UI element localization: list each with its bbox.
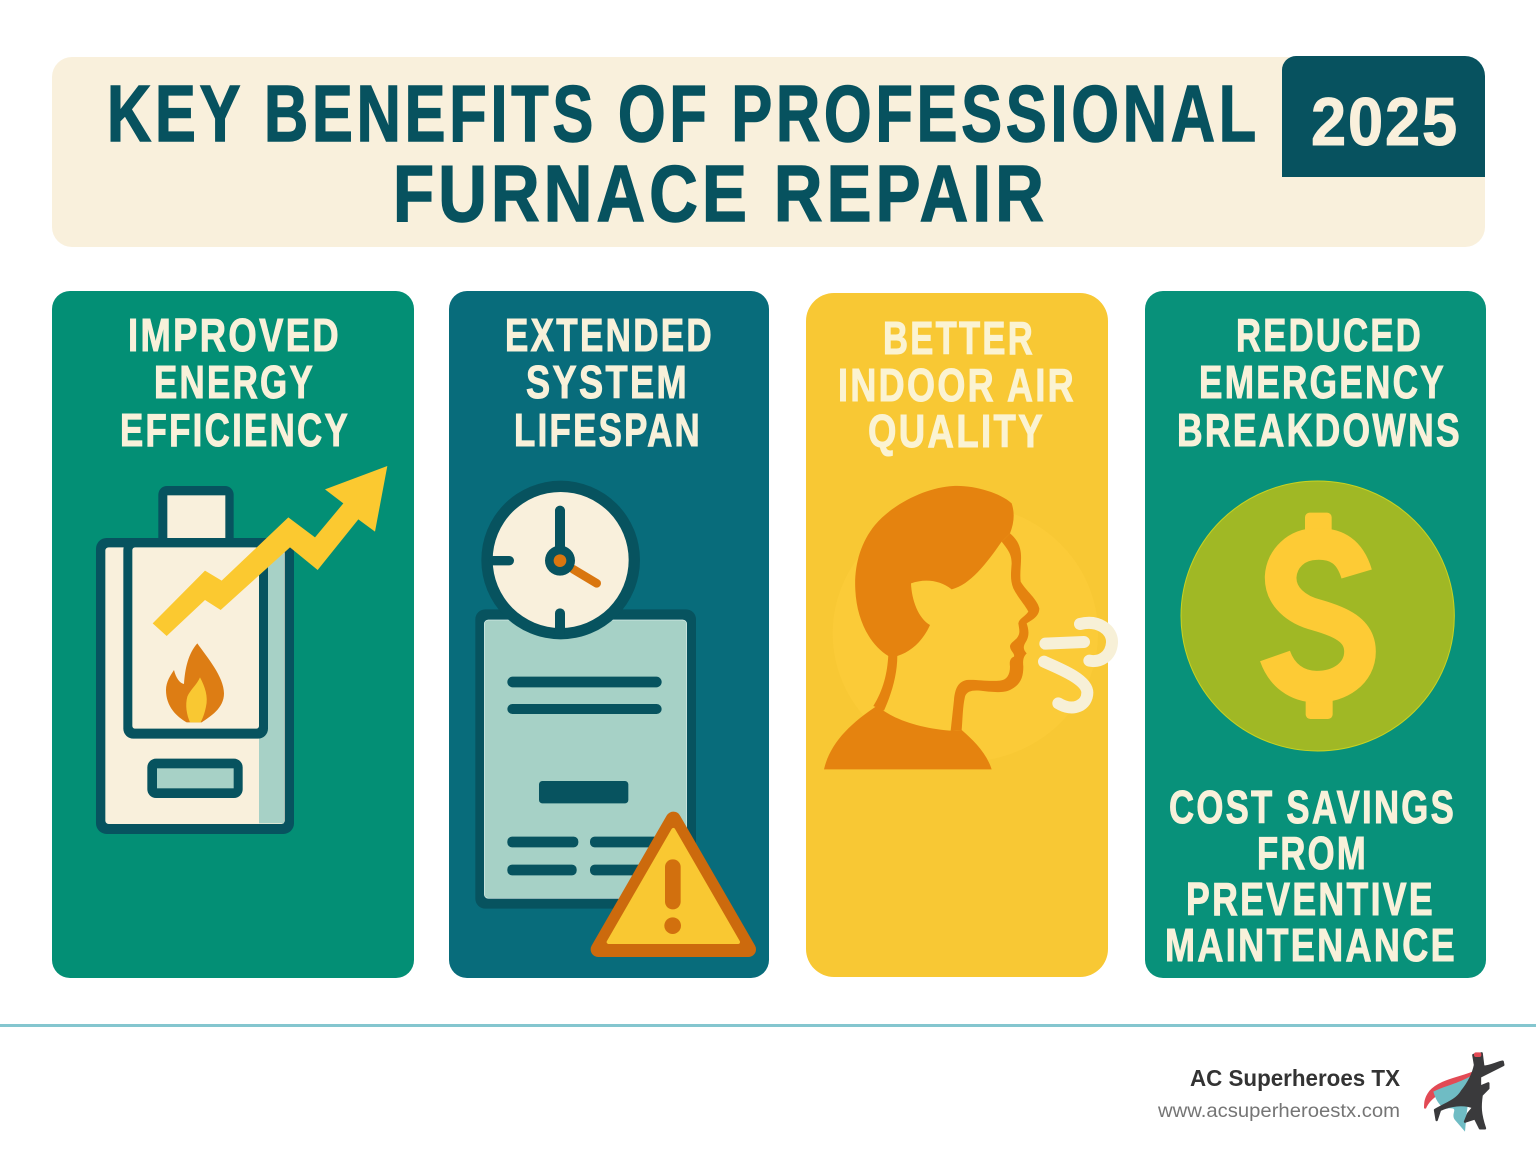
heading: extended system lifespan: LIFESPAN xyxy=(514,404,702,456)
icon: furnace with flame and rising arrow xyxy=(96,466,387,834)
heading: extended system lifespan: EXTENDED xyxy=(505,309,714,361)
heading: better indoor air quality xyxy=(838,312,1076,457)
heading: improved energy efficiency: EFFICIENCY xyxy=(120,404,350,456)
icon: service document, clock and warning xyxy=(475,481,748,949)
icon: breath swirls xyxy=(1044,623,1112,707)
title: FURNACE REPAIR xyxy=(393,149,1048,238)
text: cost savings from preventive maintenance: MAINTENANCE xyxy=(1165,919,1457,971)
icon: clock xyxy=(481,481,640,639)
icon: document xyxy=(475,609,696,909)
heading: reduced emergency breakdowns: REDUCED xyxy=(1236,309,1423,361)
year badge xyxy=(1282,56,1485,177)
text: cost savings from preventive maintenance xyxy=(1165,781,1457,971)
year badge: 2025 xyxy=(1311,84,1459,160)
icon: head silhouette xyxy=(824,486,1039,769)
icon: warning triangle xyxy=(598,819,748,949)
panel: better indoor air quality xyxy=(806,293,1112,977)
heading: better indoor air quality: BETTER xyxy=(883,312,1035,364)
panel: improved energy efficiency xyxy=(52,291,414,978)
arrow: rising trend xyxy=(153,466,387,636)
heading: improved energy efficiency xyxy=(120,309,350,456)
website: www.acsuperheroestx.com xyxy=(1157,1100,1400,1122)
icon: flame xyxy=(166,643,224,722)
heading: improved energy efficiency: IMPROVED xyxy=(128,309,341,361)
panel: reduced emergency breakdowns and cost savings xyxy=(1145,291,1486,978)
title xyxy=(107,69,1260,238)
heading: extended system lifespan xyxy=(505,309,714,456)
title banner xyxy=(52,56,1485,247)
heading: extended system lifespan: SYSTEM xyxy=(526,356,689,408)
footer brand xyxy=(1157,1052,1503,1132)
brand name: AC Superheroes TX xyxy=(1190,1065,1401,1091)
text: cost savings from preventive maintenance: FROM xyxy=(1257,827,1368,879)
text: cost savings from preventive maintenance: PREVENTIVE xyxy=(1186,873,1435,925)
icon: dollar coin xyxy=(1181,481,1454,751)
heading: improved energy efficiency: ENERGY xyxy=(154,356,315,408)
heading: reduced emergency breakdowns: EMERGENCY xyxy=(1199,356,1446,408)
icon: flying superhero logo xyxy=(1425,1052,1503,1132)
panel: extended system lifespan xyxy=(449,291,769,978)
heading: better indoor air quality: INDOOR AIR xyxy=(838,359,1076,411)
heading: reduced emergency breakdowns xyxy=(1177,309,1462,456)
heading: better indoor air quality: QUALITY xyxy=(868,405,1045,457)
icon: person breathing clean air xyxy=(824,486,1112,769)
heading: reduced emergency breakdowns: BREAKDOWNS xyxy=(1177,404,1462,456)
